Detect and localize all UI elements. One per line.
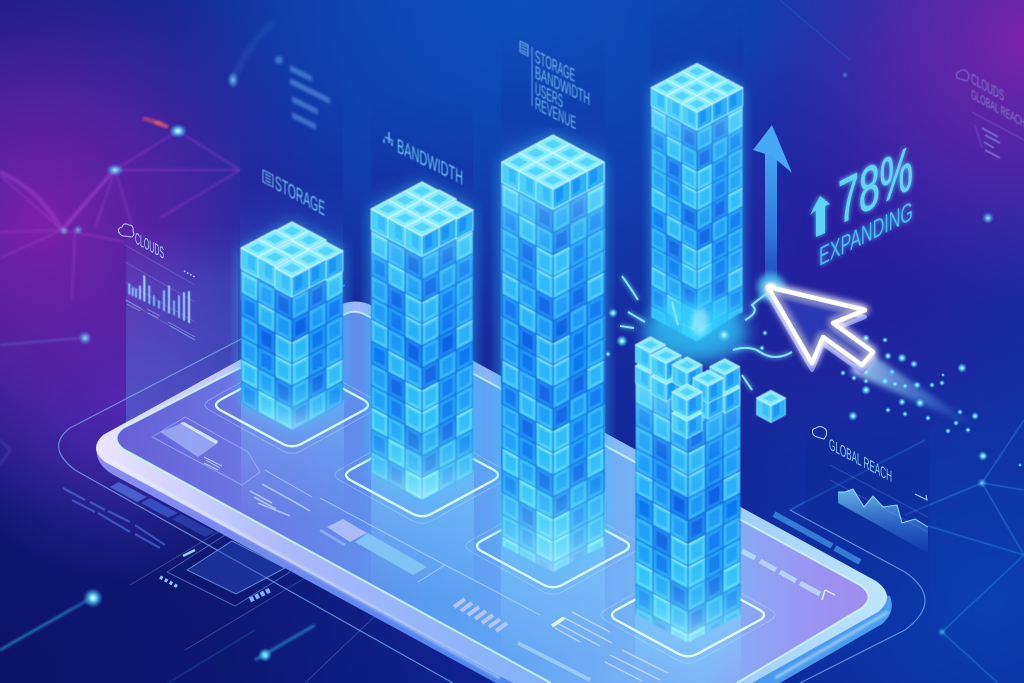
icon: document: [263, 170, 273, 187]
lower text lines: [555, 612, 668, 681]
label: metric list: REVENUE: [535, 94, 576, 134]
blurred info list, top centre: [275, 56, 330, 130]
stat: 78% expanding: 78%: [838, 131, 913, 238]
spark burst at tower break: [605, 276, 792, 390]
tablet device: [96, 302, 892, 683]
chart: global reach: GLOBAL REACH: [829, 435, 892, 486]
chart: clouds: [118, 224, 195, 340]
tablet side edge: [97, 442, 892, 683]
icon: network: [384, 132, 393, 146]
ring: users tower: [466, 498, 640, 594]
icon: cloud: [118, 224, 134, 237]
panel: global reach backdrop: [805, 410, 930, 630]
stat: 78% expanding: EXPANDING: [819, 195, 913, 272]
outside decor left: [63, 465, 375, 683]
bright inner screen edge: [116, 312, 869, 683]
big up arrow: [753, 125, 792, 290]
tablet rim: [96, 302, 887, 683]
stat: 78% expanding: [810, 131, 913, 272]
dashes right: [742, 551, 820, 594]
label: bandwidth: [384, 132, 463, 190]
label: storage: STORAGE: [275, 171, 325, 221]
tower base rings: [205, 357, 775, 663]
light beams below towers: [241, 400, 741, 683]
label: metric list: STORAGE: [535, 47, 575, 87]
info panel top right: [956, 70, 1024, 158]
comet trail: [840, 334, 1022, 467]
tower: bandwidth: [371, 182, 473, 500]
label: metric list: USERS: [535, 79, 563, 113]
ring: expanding tower: [601, 567, 775, 663]
tower: users: [501, 135, 605, 572]
bright rim highlight: [112, 462, 888, 678]
ring: storage: [205, 357, 379, 453]
ring: bandwidth: [335, 427, 509, 523]
tower: lower expanding tower: [635, 337, 741, 642]
stripes: [454, 599, 507, 631]
screen details: [152, 417, 860, 681]
loose cube: [757, 390, 785, 423]
tablet screen surface: [116, 312, 869, 683]
holographic column behind tower 4: [651, 0, 743, 120]
text lines: [250, 484, 310, 516]
label: storage: [263, 170, 325, 221]
label: bandwidth: BANDWIDTH: [397, 135, 463, 190]
flat cards: [320, 519, 427, 575]
tower: upper expanding tower: [651, 63, 743, 342]
holographic column behind tower 2: [371, 90, 473, 260]
network lines: purple left: [0, 131, 240, 465]
icon: cloud: [812, 426, 827, 439]
cursor arrow: [757, 273, 873, 372]
label: metric list: BANDWIDTH: [535, 63, 590, 110]
card with lines: [152, 417, 260, 485]
holographic column behind tower 1: [240, 60, 343, 300]
outer tablet outline: [59, 285, 925, 683]
holographic column behind tower 3: [501, 30, 605, 190]
tower: storage: [241, 222, 343, 430]
panel: clouds backdrop: [126, 225, 238, 430]
icon: small up arrow: [810, 196, 830, 237]
label: metric list: [520, 41, 590, 134]
chart: global reach: [812, 426, 928, 553]
chart: clouds: CLOUDS: [135, 228, 164, 263]
icon: list: [520, 41, 528, 56]
